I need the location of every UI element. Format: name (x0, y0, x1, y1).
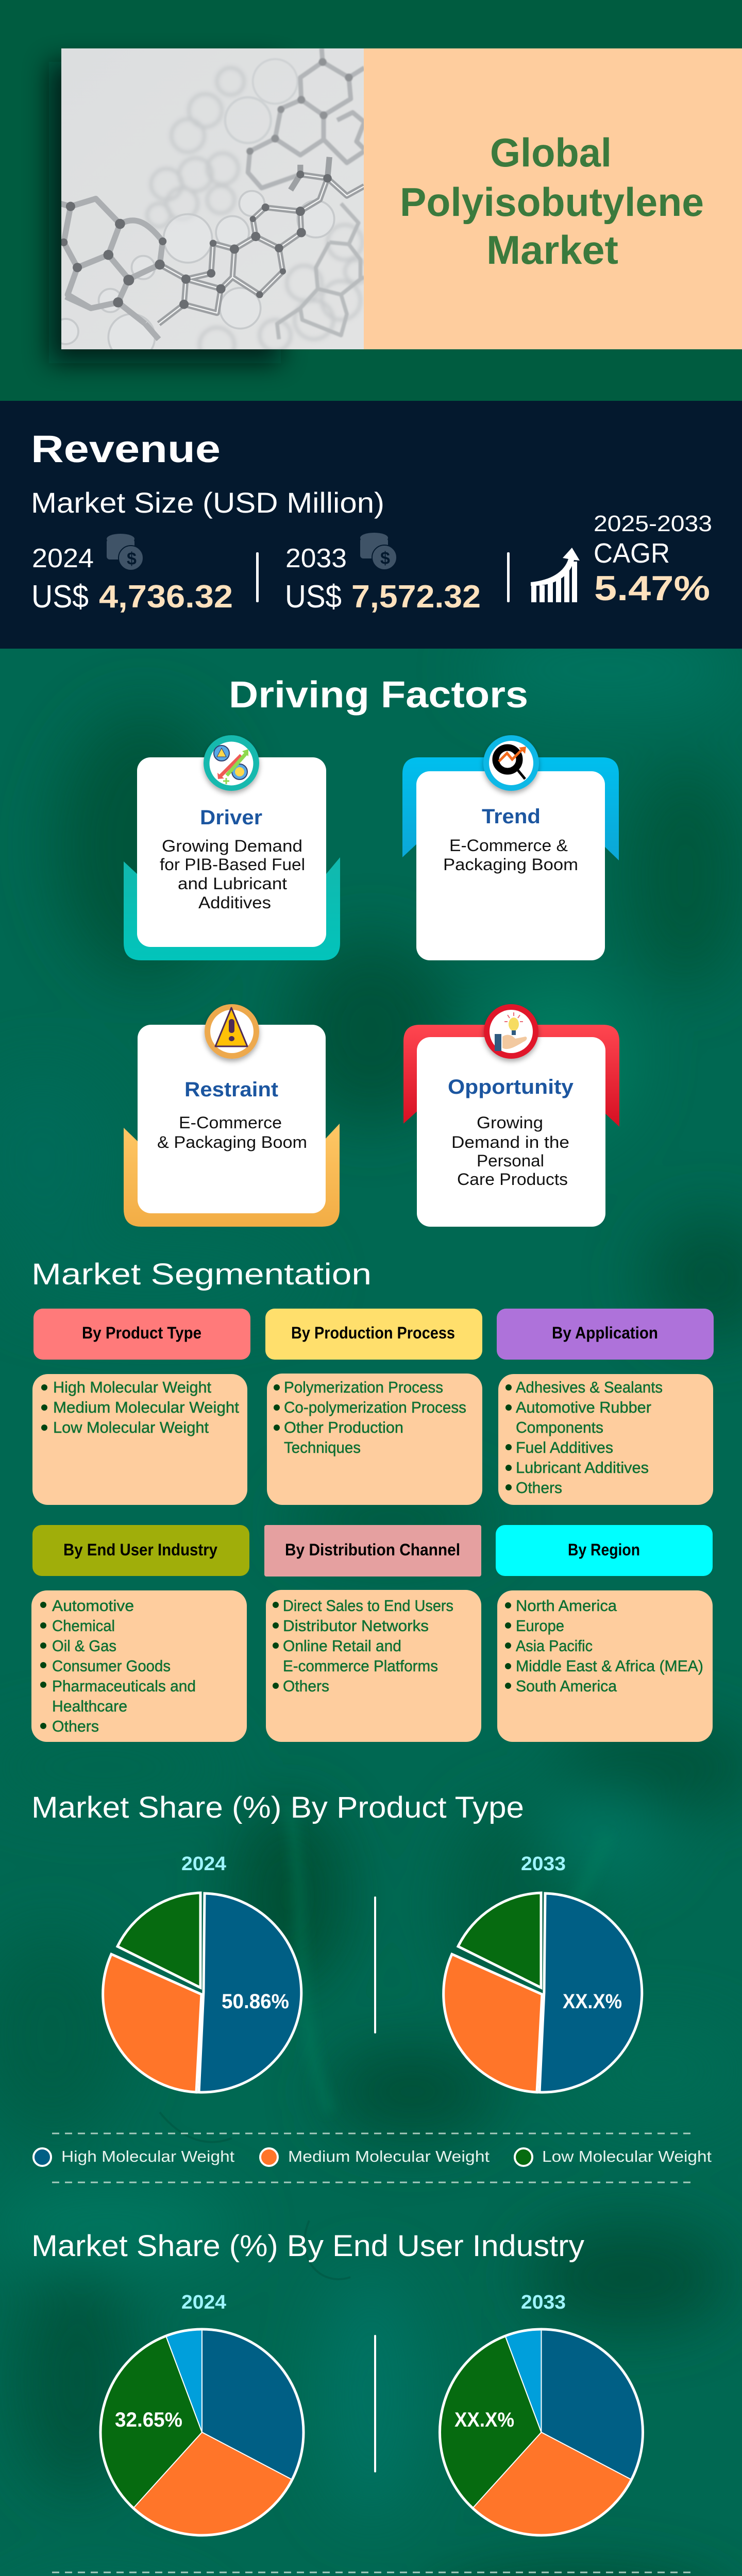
chart: product type pies (103, 1853, 642, 2092)
heading: driving factors: Driving Factors (229, 674, 528, 716)
top band (0, 0, 742, 401)
opportunity body: Personal (477, 1151, 544, 1170)
list: applications: Automotive Rubber (516, 1398, 651, 1416)
list: product types (32, 1374, 247, 1505)
year 2033: 2033 (521, 2292, 566, 2313)
hero photo: glass molecular lattice (53, 48, 368, 363)
list: channels: Distributor Networks (283, 1617, 429, 1635)
icon: trend (483, 735, 539, 791)
list: channels: Others (283, 1677, 329, 1695)
pie 2024 value: 50.86% (222, 1990, 289, 2013)
segment: by application: By Application (552, 1324, 658, 1342)
restraint body (157, 1113, 307, 1151)
panel: revenue (0, 401, 742, 649)
heading: market share by product type: Market Share (%) By Product Type (31, 1791, 524, 1824)
list: regions (497, 1590, 713, 1742)
segment: by end user industry (31, 1525, 249, 1742)
list: industries: Chemical (52, 1617, 115, 1635)
pie 2033 (440, 2329, 643, 2535)
title text: Global (490, 130, 612, 175)
title text: Polyisobutylene (400, 179, 704, 225)
CAGR block: CAGR (594, 538, 670, 569)
segment: by product type (32, 1309, 250, 1505)
divider (374, 2335, 376, 2472)
card: driver (124, 735, 340, 960)
image drop shadow (49, 62, 281, 363)
segment: by region: By Region (568, 1540, 640, 1559)
icon: coins 2024 (107, 534, 143, 570)
card: restraint (124, 1004, 340, 1227)
revenue heading: Revenue (31, 428, 221, 470)
list: processes: Polymerization Process (284, 1378, 443, 1396)
list: channels (266, 1590, 481, 1742)
icon: restraint (205, 1004, 259, 1059)
list: processes: Other Production (284, 1418, 403, 1436)
icon: coins 2033: $ (380, 549, 390, 568)
list: channels: E-commerce Platforms (283, 1657, 438, 1675)
2024 value: 2024 (32, 544, 94, 573)
list: industries: Oil & Gas (52, 1637, 116, 1655)
market size label: Market Size (USD Million) (31, 486, 384, 519)
2033 value (285, 544, 481, 615)
list: regions: Europe (516, 1617, 564, 1635)
segment: by application (497, 1309, 714, 1505)
2024 value: US$ (31, 579, 89, 615)
list: regions: South America (516, 1677, 617, 1695)
list: industries: Others (52, 1717, 99, 1735)
trend body: Packaging Boom (443, 855, 578, 874)
year 2024: 2024 (181, 2292, 226, 2313)
icon: opportunity (484, 1004, 538, 1059)
restraint body: E-Commerce (179, 1113, 282, 1132)
heading: market share by end user industry: Market Share (%) By End User Industry (31, 2229, 584, 2263)
year 2033: 2033 (521, 1853, 566, 1875)
opportunity body (451, 1113, 569, 1189)
list: channels: Online Retail and (283, 1637, 401, 1655)
CAGR block: 2025-2033 (594, 511, 712, 536)
list: industries: Pharmaceuticals and (52, 1677, 196, 1695)
list: applications: Adhesives & Sealants (516, 1378, 663, 1396)
pie 2033 value: XX.X% (454, 2409, 514, 2431)
trend title: Trend (482, 805, 541, 828)
year 2024: 2024 (181, 1853, 226, 1875)
divider (256, 552, 259, 602)
background: flowing green texture (0, 634, 742, 2576)
divider (374, 1896, 376, 2033)
icon: driver (204, 735, 259, 791)
list: processes: Co-polymerization Process (284, 1398, 466, 1416)
segment: by distribution channel (264, 1525, 481, 1742)
list: regions: Middle East & Africa (MEA) (516, 1657, 703, 1675)
divider (507, 552, 510, 602)
list: channels: Direct Sales to End Users (283, 1597, 453, 1615)
driver title: Driver (200, 806, 262, 829)
pie 2024 (103, 1893, 301, 2092)
legend: end user (52, 2572, 696, 2576)
2033 value: 2033 (285, 544, 347, 573)
segment: by product type: By Product Type (82, 1324, 201, 1342)
opportunity body: Demand in the (451, 1133, 569, 1151)
opportunity body: Growing (477, 1113, 543, 1132)
list: applications: Others (516, 1479, 562, 1497)
list: applications: Lubricant Additives (516, 1459, 649, 1477)
pie 2033 value: XX.X% (563, 1990, 622, 2013)
opportunity body: Care Products (457, 1170, 568, 1189)
segment: by region (496, 1525, 713, 1742)
title text (400, 130, 704, 273)
icon: coins 2024: $ (127, 549, 137, 569)
segment: by production process: By Production Process (291, 1324, 455, 1342)
driver body (160, 837, 305, 912)
list: industries: Healthcare (52, 1697, 127, 1715)
driver body: Growing Demand (162, 837, 302, 855)
list: product types: Low Molecular Weight (53, 1418, 209, 1436)
title panel (364, 48, 742, 349)
chart: end user pies (100, 2292, 643, 2535)
restraint title: Restraint (184, 1078, 278, 1101)
opportunity title: Opportunity (448, 1076, 574, 1098)
legend: product type: Low Molecular Weight (542, 2147, 712, 2165)
legend: product type: Medium Molecular Weight (288, 2147, 490, 2165)
list: product types: High Molecular Weight (53, 1378, 211, 1396)
restraint body: & Packaging Boom (157, 1133, 307, 1151)
list: industries (31, 1590, 247, 1742)
icon: growth arrow (531, 548, 580, 602)
2033 value: US$ (285, 579, 342, 615)
list: product types: Medium Molecular Weight (53, 1398, 239, 1416)
segment: by production process (265, 1309, 482, 1505)
pie 2024 value: 32.65% (115, 2409, 182, 2431)
trend body (443, 836, 578, 874)
pie 2033 (444, 1893, 642, 2092)
driver body: Additives (198, 893, 271, 912)
list: regions: North America (516, 1597, 617, 1615)
icon: coins 2033 (360, 533, 397, 570)
title text: Market (486, 227, 618, 273)
list: industries: Automotive (52, 1597, 134, 1615)
list: processes: Techniques (284, 1438, 361, 1456)
heading: market segmentation: Market Segmentation (31, 1258, 372, 1291)
segment: by distribution channel: By Distribution Channel (285, 1540, 460, 1559)
2024 value: 4,736.32 (99, 579, 233, 615)
card: opportunity (403, 1004, 619, 1227)
2024 value (31, 544, 233, 615)
pie 2024 (100, 2329, 303, 2535)
CAGR block (594, 511, 712, 608)
card: trend (402, 735, 619, 960)
legend: product type (33, 2133, 712, 2182)
CAGR block: 5.47% (594, 569, 710, 608)
list: processes (267, 1374, 482, 1505)
2033 value: 7,572.32 (351, 579, 481, 615)
list: industries: Consumer Goods (52, 1657, 171, 1675)
list: applications (498, 1374, 713, 1505)
list: regions: Asia Pacific (516, 1637, 593, 1655)
segment: by end user industry: By End User Industry (63, 1540, 217, 1559)
driver body: for PIB-Based Fuel (160, 855, 305, 874)
driver body: and Lubricant (178, 874, 287, 893)
trend body: E-Commerce & (449, 836, 568, 855)
list: applications: Fuel Additives (516, 1438, 613, 1456)
list: applications: Components (516, 1418, 603, 1436)
legend: product type: High Molecular Weight (61, 2147, 234, 2165)
